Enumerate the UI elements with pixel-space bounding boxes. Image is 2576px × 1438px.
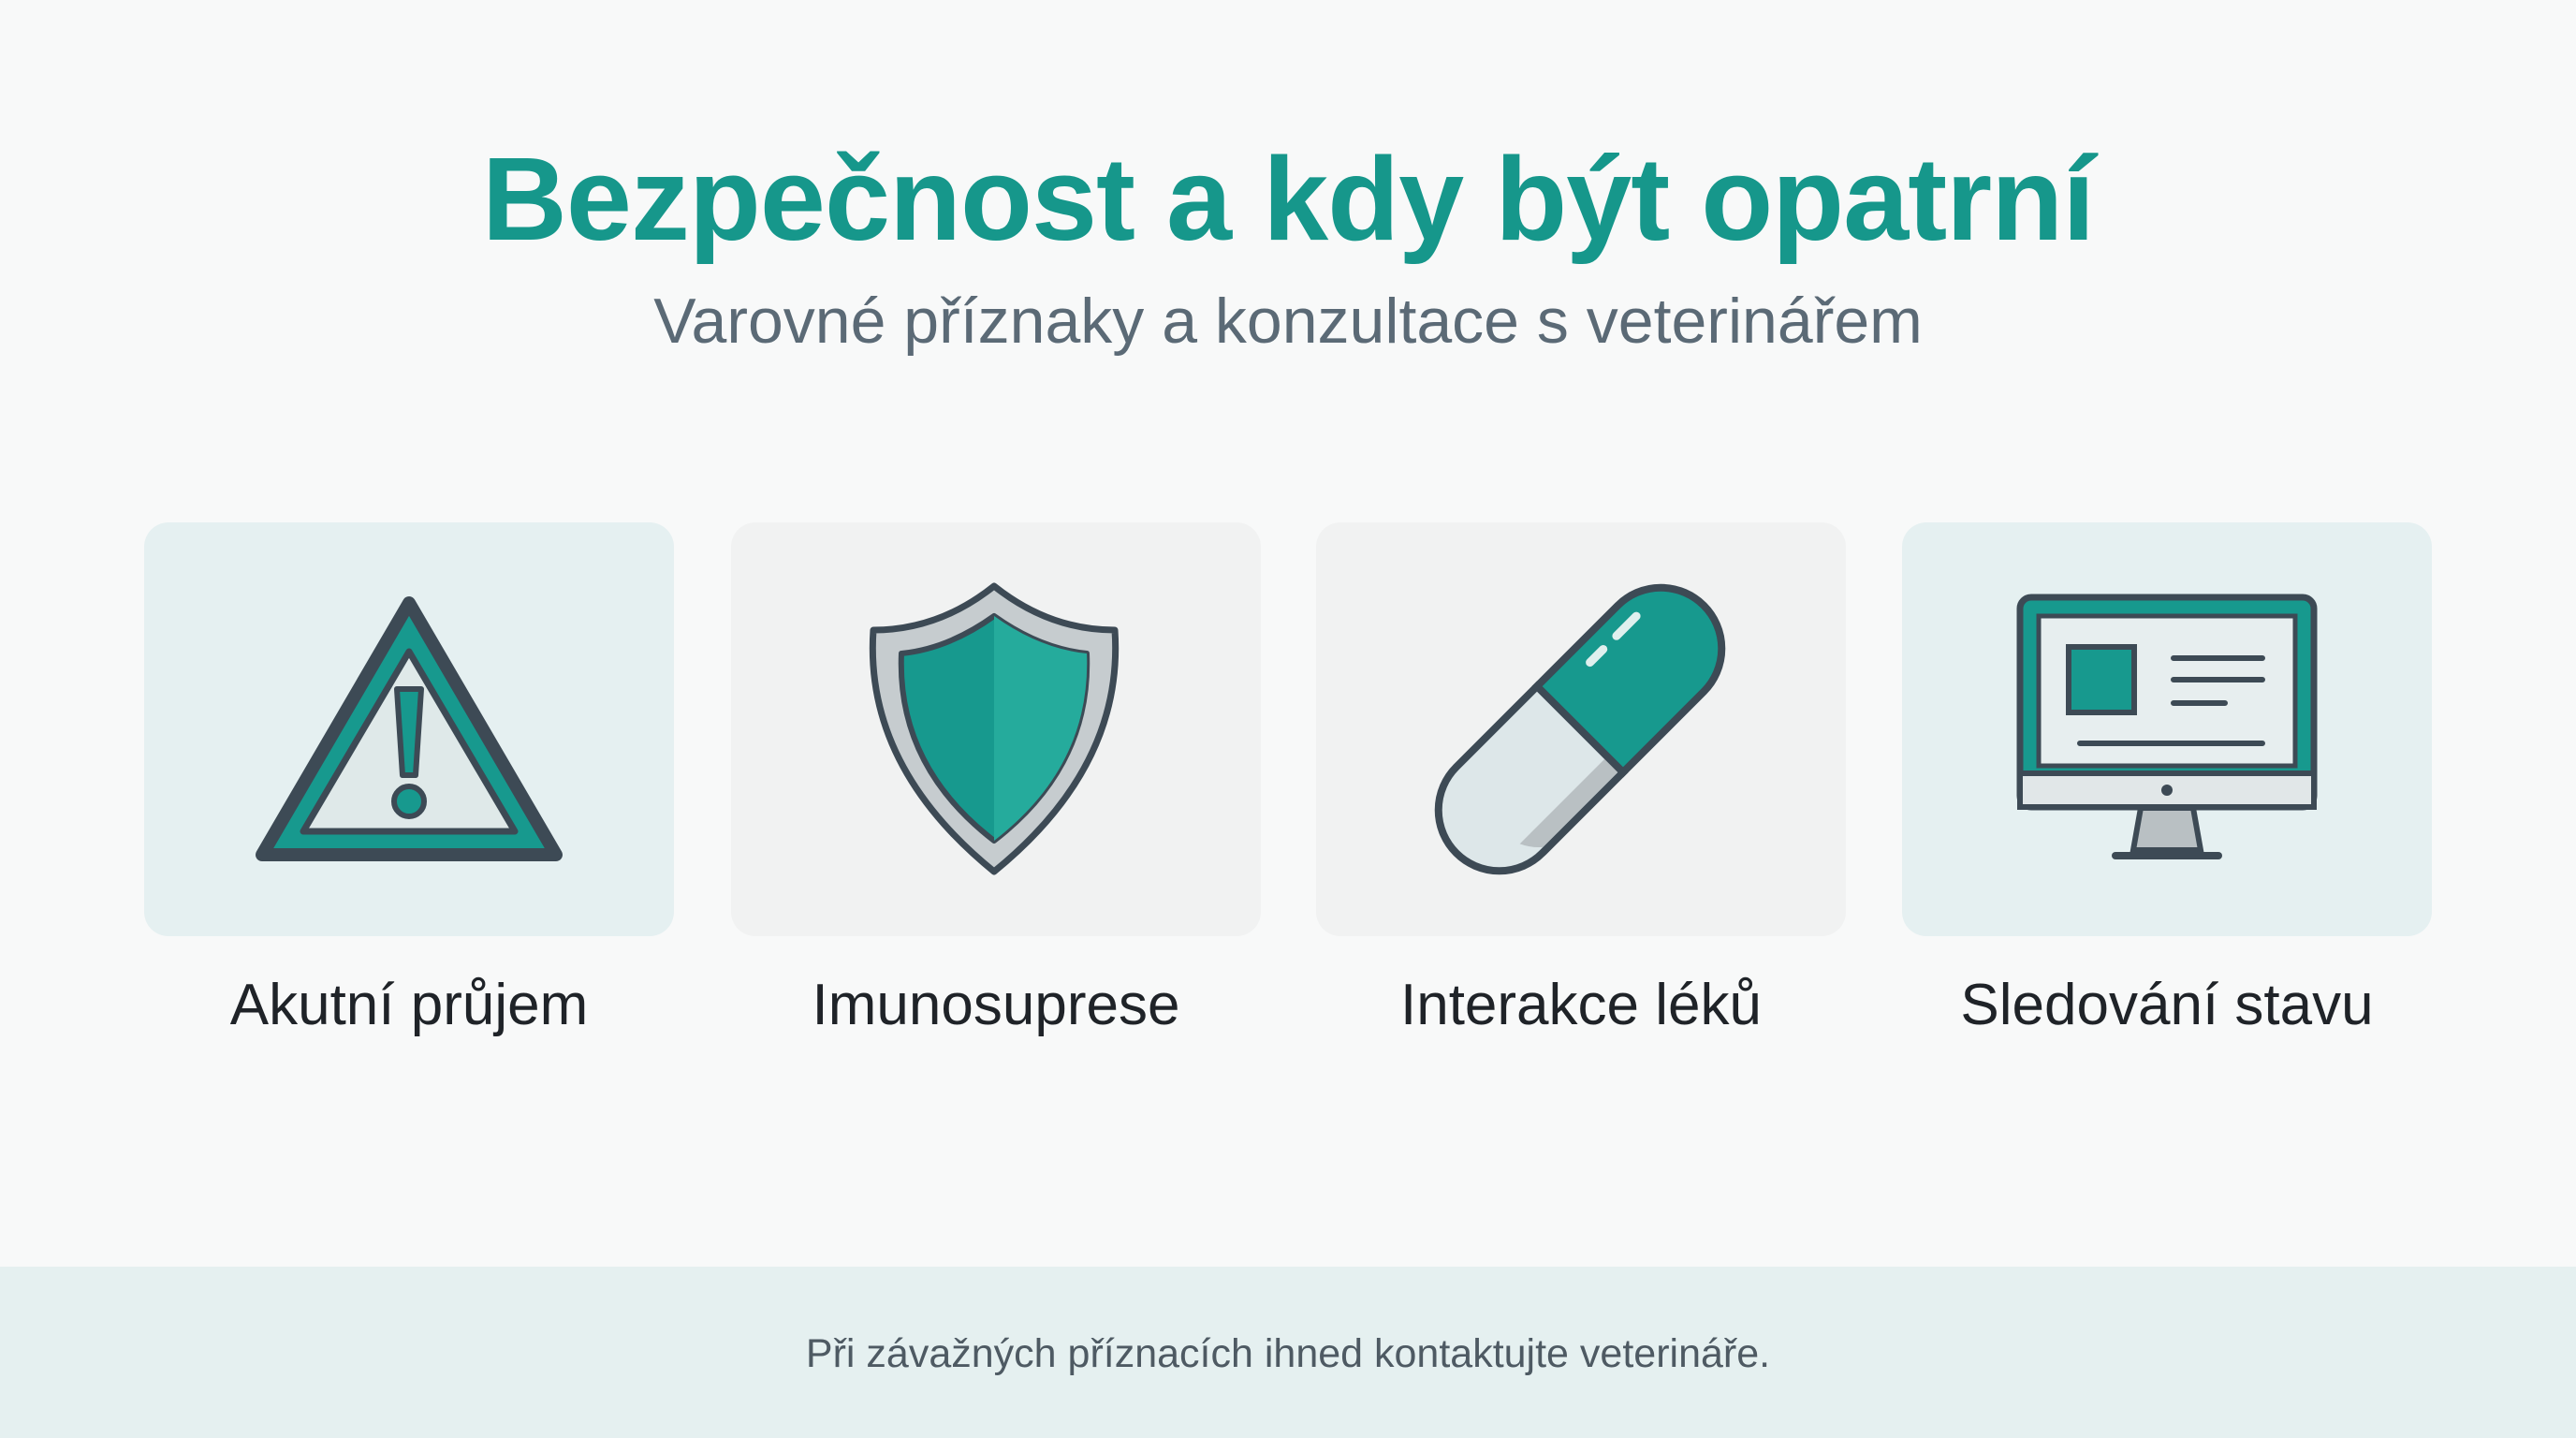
panel: drug interactions — [1316, 522, 1846, 936]
icon: monitor — [2016, 594, 2318, 859]
footer text: Při závažných příznacích ihned kontaktujte veterináře. — [806, 1331, 1770, 1376]
icon: pill — [1434, 584, 1726, 874]
label: acute diarrhea: Akutní průjem — [230, 973, 588, 1037]
footer band — [0, 1267, 2576, 1438]
title: Bezpečnost a kdy být opatrní — [482, 133, 2094, 265]
subtitle: Varovné příznaky a konzultace s veterinářem — [653, 286, 1923, 357]
label: immunosuppression: Imunosuprese — [812, 973, 1179, 1037]
icon: shield — [869, 582, 1120, 875]
label: drug interactions: Interakce léků — [1400, 973, 1762, 1037]
label: monitoring: Sledování stavu — [1960, 973, 2374, 1037]
panel: acute diarrhea — [144, 522, 674, 936]
panel: monitoring — [1902, 522, 2432, 936]
panel: immunosuppression — [731, 522, 1261, 936]
icon: warning triangle — [256, 596, 563, 861]
